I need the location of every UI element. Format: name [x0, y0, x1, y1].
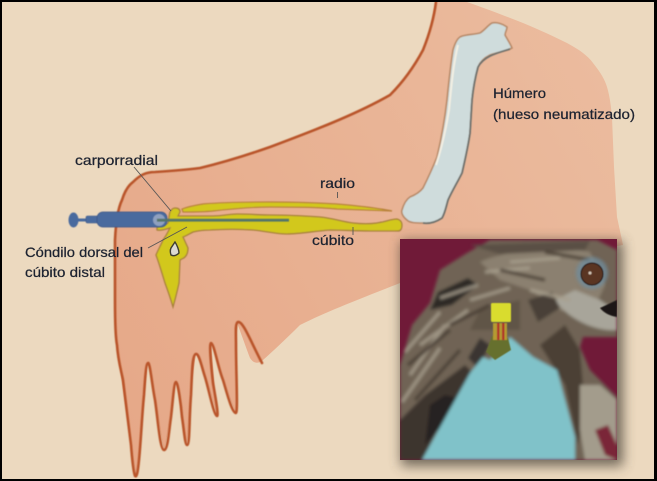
- leader line: condyle: [148, 227, 187, 248]
- eye: [576, 257, 608, 289]
- head highlights: [480, 249, 605, 318]
- wing outline: [115, 2, 436, 476]
- label: humero: Húmero: [493, 85, 546, 101]
- label: carporradial: carporradial: [75, 152, 158, 168]
- carpal and ulna bone: [156, 208, 402, 307]
- cloth: [422, 337, 575, 460]
- wing skin area: [115, 2, 623, 477]
- radius bone: [182, 202, 392, 212]
- leader line: cubito: [352, 227, 354, 235]
- injected catheter: [486, 303, 511, 360]
- label: hueso neumatizado: (hueso neumatizado): [493, 106, 635, 122]
- beak opening: [600, 300, 617, 317]
- label: cubito distal: cúbito distal: [25, 264, 105, 280]
- label: cubito: cúbito: [312, 232, 354, 248]
- dark wing patches: [430, 278, 478, 310]
- photo: hawk with injection: [400, 239, 617, 460]
- photo shadow: [401, 241, 623, 466]
- humerus bone: [402, 23, 512, 223]
- light feather streaks: [402, 258, 570, 402]
- syringe: [68, 212, 167, 228]
- leader line: radio: [336, 192, 338, 198]
- bone hollow: [170, 242, 179, 256]
- needle: [157, 219, 289, 222]
- red patch near tail: [595, 425, 617, 460]
- leader line: carporradial: [134, 167, 171, 211]
- label: condilo dorsal: Cóndilo dorsal del: [25, 244, 143, 260]
- label: radio: radio: [320, 175, 355, 191]
- bird body: [400, 240, 617, 460]
- light lower-right feathers: [580, 385, 617, 460]
